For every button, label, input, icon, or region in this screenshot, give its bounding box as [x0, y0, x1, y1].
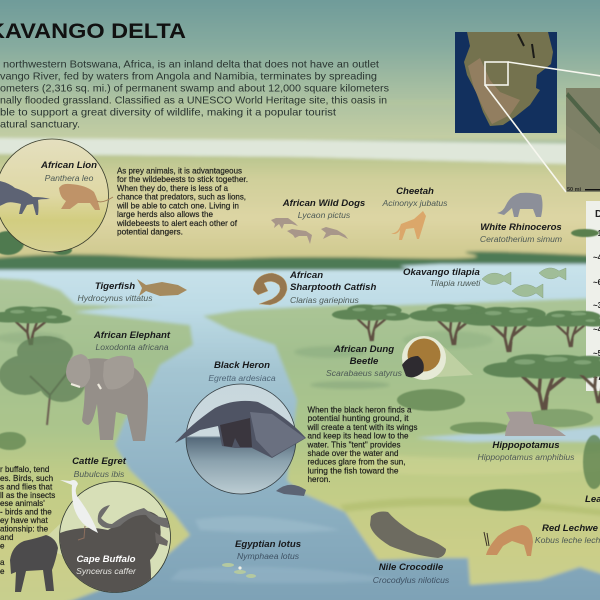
left land: [0, 278, 193, 600]
red lechwe: Red Lechwe: [542, 523, 599, 534]
text: buffalo note (cropped): a: [0, 558, 5, 567]
text: buffalo note (cropped): ese animals': [0, 499, 45, 508]
icon: crocodile: [370, 512, 446, 558]
nile crocodile: Crocodylus niloticus: [373, 575, 450, 585]
tigerfish: Hydrocynus vittatus: [78, 293, 153, 303]
locator square: [485, 62, 508, 85]
text: buffalo note (cropped): - birds and the: [0, 508, 52, 516]
catfish: African: [289, 270, 323, 281]
okavango tilapia: [403, 267, 566, 298]
black heron panel: Black Heron: [214, 360, 270, 371]
hippopotamus: Hippopotamus: [492, 440, 560, 451]
african elephant: African Elephant: [93, 330, 171, 341]
circle inset: [186, 384, 296, 494]
text: buffalo note (cropped): es. Birds, such: [0, 474, 53, 483]
intro text block: [0, 60, 389, 130]
egyptian lotus: [222, 539, 301, 578]
shaded grass patches: [294, 346, 366, 358]
hippopotamus: [478, 412, 575, 462]
text: buffalo note (cropped): ationship: the: [0, 524, 49, 534]
african elephant: [66, 330, 171, 441]
icon: dogs: [271, 218, 348, 244]
dung beetle panel: Beetle: [350, 356, 379, 367]
text: wildebeest note: wildebeests to alert each other of: [116, 219, 238, 228]
icon: bushy tree beside elephant: [0, 336, 86, 425]
icon: lechwe: [486, 525, 533, 556]
text: heron note: reduces glare from the sun,: [308, 458, 406, 467]
catfish: Clarias gariepinus: [290, 295, 359, 305]
text: wildebeest note: chance that predators, such as lions,: [117, 193, 246, 202]
dung beetle panel: [326, 336, 473, 380]
small rock in water: [276, 485, 306, 496]
cheetah: [382, 186, 448, 240]
icon: big buffalo: [60, 511, 161, 592]
text: heron note: [306, 406, 418, 484]
text: buffalo note (cropped): and: [0, 533, 14, 542]
panel: delta legend (cropped): [586, 201, 600, 391]
wild dogs: African Wild Dogs: [282, 198, 365, 209]
icon: small buffalo: [10, 535, 58, 592]
dung beetle panel: Scarabaeus satyrus: [326, 368, 403, 378]
catfish: Sharptooth Catfish: [290, 282, 376, 293]
text: heron note: When the black heron finds a: [308, 406, 412, 414]
text: heron note: will create a tent with its wings: [306, 423, 418, 432]
satellite inset map: [566, 88, 600, 193]
tigerfish: [78, 279, 187, 303]
text: buffalo note (cropped): ll as the insects: [0, 491, 55, 500]
text: wildebeest note: for the wildebeests to stick together.: [117, 175, 248, 184]
hippo pool: [415, 426, 600, 442]
text: heron note: shade over the water and: [308, 449, 398, 458]
icon: lion: [59, 184, 100, 210]
black heron panel: Egretta ardesiaca: [208, 373, 276, 383]
panel: African lion circle: [0, 139, 113, 252]
nile crocodile: [370, 512, 450, 585]
egyptian lotus: Nymphaea lotus: [237, 551, 300, 561]
text: buffalo note (cropped): r buffalo, tend: [0, 465, 49, 474]
text: heron note: water. This "tent" provides: [307, 440, 400, 449]
text: wildebeest note: As prey animals, it is advantageous: [117, 166, 242, 176]
icon: dung ball and beetle: [402, 336, 446, 380]
right land: [203, 298, 600, 585]
text: wildebeest note: large herds also allows the: [117, 210, 213, 219]
cape buffalo panel: [10, 456, 176, 600]
catfish: [253, 270, 376, 305]
cape buffalo panel: Bubulcus ibis: [74, 469, 125, 479]
okavango tilapia: Okavango tilapia: [403, 267, 480, 278]
intro text block: northwestern Botswana, Africa, is an inland delta that does not have an outlet: [3, 60, 379, 70]
white rhinoceros: White Rhinoceros: [480, 222, 562, 233]
dung beetle panel: African Dung: [333, 344, 394, 355]
label: African Lion: [40, 160, 97, 171]
zoom connector lines: [485, 62, 600, 192]
cheetah: Cheetah: [396, 186, 434, 197]
egyptian lotus: Egyptian lotus: [235, 539, 301, 550]
text: heron note: heron.: [308, 475, 330, 484]
text: heron note: potential hunting ground, it: [308, 414, 409, 423]
black heron panel: [175, 360, 306, 494]
text: wildebeest note: [116, 166, 248, 236]
text: wildebeest note: will be able to catch one. Living in: [116, 201, 239, 210]
treeline: [0, 251, 600, 270]
intro text block: vango River, fed by waters from Angola and Namibia, terminates by spreading: [0, 72, 377, 82]
icon: black heron with wings spread: [175, 401, 306, 458]
hippopotamus: Hippopotamus amphibius: [478, 452, 575, 462]
cheetah: Acinonyx jubatus: [382, 198, 448, 208]
text: buffalo note (cropped): [0, 465, 55, 576]
icon: bushes: [0, 229, 600, 511]
text: buffalo note (cropped): s and flies that: [0, 482, 53, 492]
text: buffalo note (cropped): e: [0, 567, 5, 576]
intro text block: atural sanctuary.: [0, 120, 80, 130]
icon: cheetah: [391, 211, 426, 240]
african elephant: Loxodonta africana: [95, 342, 169, 352]
icon: lily pads: [222, 563, 256, 578]
cape buffalo panel: Cattle Egret: [72, 456, 127, 467]
tigerfish: Tigerfish: [95, 281, 135, 292]
water shading: [195, 517, 340, 532]
red lechwe: [484, 523, 600, 556]
text: wildebeest note: potential dangers.: [117, 228, 183, 236]
icon: catfish: [253, 273, 287, 305]
left bushes near lion circle: [0, 231, 72, 255]
icon: tigerfish: [137, 279, 187, 296]
text: buffalo note (cropped): e: [0, 542, 5, 550]
okavango tilapia: Tilapia ruweti: [430, 278, 481, 288]
nile crocodile: Nile Crocodile: [379, 562, 444, 573]
wild dogs: Lycaon pictus: [298, 210, 351, 220]
icon: tilapia fish: [482, 268, 566, 298]
icon: elephant: [66, 354, 148, 441]
acacia trees: [0, 306, 71, 345]
white rhinoceros: [480, 193, 562, 244]
cape buffalo panel: Syncerus caffer: [76, 566, 137, 576]
scale bar: 50 mi: [567, 187, 582, 193]
text: buffalo note (cropped): ey have what: [0, 516, 48, 525]
intro text block: ometers (2,316 sq. mi.) of permanent swamp and about 12,000 square kilometers: [0, 84, 389, 94]
icon: hippo: [505, 412, 566, 436]
locator map: southern Africa: [455, 32, 557, 133]
text: heron note: and keep its head low to the: [308, 432, 409, 441]
wild dogs: [271, 198, 365, 244]
text: wildebeest note: When they do, there is less of a: [117, 184, 228, 193]
text: heron note: luring the fish toward the: [308, 466, 399, 475]
icon: wildebeest: [0, 180, 50, 215]
icon: cattle egret: [60, 480, 98, 533]
intro text block: nally flooded grassland. Classified as a UNESCO World Heritage site, this oasis in: [0, 96, 387, 106]
icon: rhino: [497, 193, 542, 217]
intro text block: ble to support a great diversity of wildlife, making it a popular tourist: [0, 108, 336, 118]
panel: African lion circle: Panthera leo: [45, 173, 94, 183]
trees and bushes: [0, 229, 600, 511]
white rhinoceros: Ceratotherium simum: [480, 234, 562, 244]
cape buffalo panel: Cape Buffalo: [76, 554, 136, 565]
